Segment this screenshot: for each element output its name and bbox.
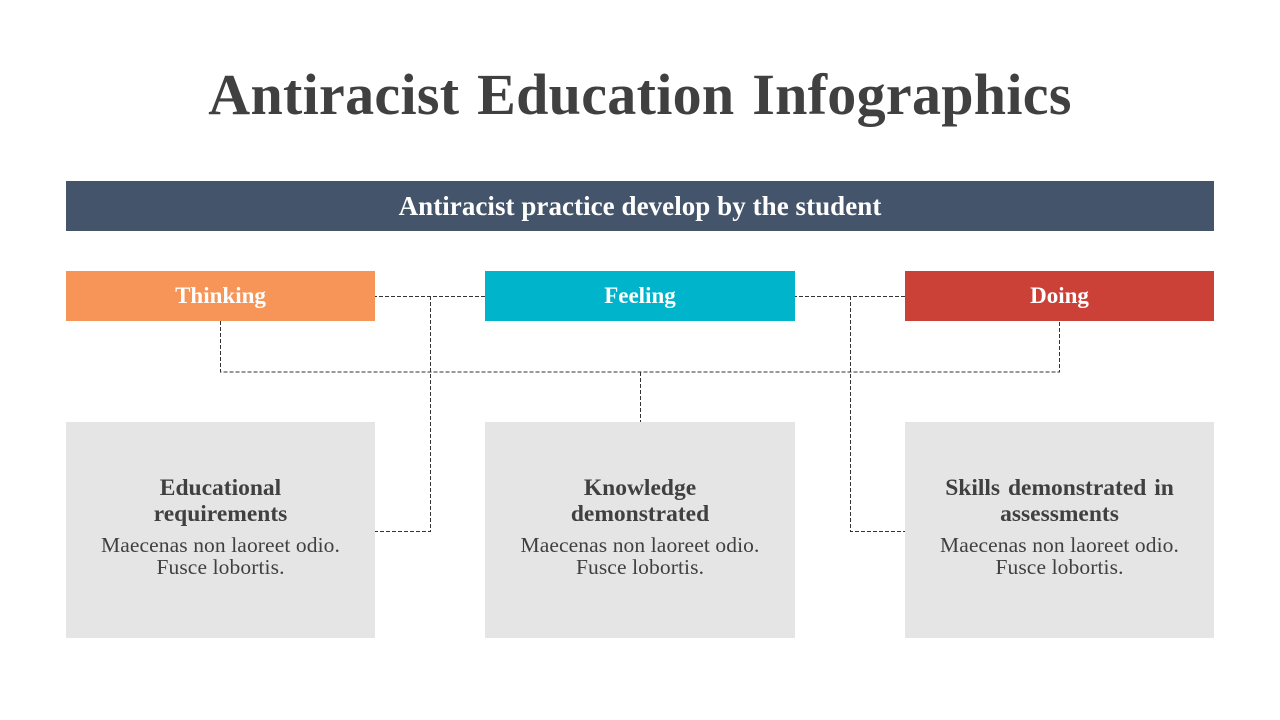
panel heading — [945, 475, 1174, 527]
panel text — [101, 533, 340, 579]
panel: educational requirements — [66, 422, 375, 638]
panel heading: requirements — [154, 501, 287, 527]
banner — [66, 181, 1214, 231]
panel: knowledge demonstrated — [485, 422, 795, 638]
banner: Antiracist practice develop by the student — [399, 190, 881, 220]
panel: skills demonstrated — [905, 422, 1214, 638]
header: Doing: Doing — [1030, 283, 1089, 308]
header: Thinking — [66, 271, 375, 321]
panel text — [940, 533, 1179, 579]
panel heading — [154, 475, 287, 527]
header: Feeling — [485, 271, 795, 321]
panel heading: demonstrated — [571, 501, 709, 527]
panel text: Maecenas non laoreet odio. — [101, 533, 340, 557]
panel text: Maecenas non laoreet odio. — [940, 533, 1179, 557]
header: Doing — [905, 271, 1214, 321]
header: Feeling: Feeling — [604, 283, 676, 308]
panel heading: Educational — [160, 475, 281, 501]
panel text — [520, 533, 760, 579]
panel heading: assessments — [1000, 501, 1119, 527]
header: Thinking: Thinking — [175, 283, 266, 308]
title: Antiracist Education Infographics — [208, 62, 1072, 127]
panel heading: Knowledge — [584, 475, 696, 501]
panel text: Fusce lobortis. — [995, 555, 1124, 579]
panel heading — [571, 475, 709, 527]
panel text: Fusce lobortis. — [576, 555, 704, 579]
panel heading: Skills demonstrated in — [945, 475, 1174, 501]
panel text: Maecenas non laoreet odio. — [520, 533, 760, 557]
panel text: Fusce lobortis. — [156, 555, 285, 579]
